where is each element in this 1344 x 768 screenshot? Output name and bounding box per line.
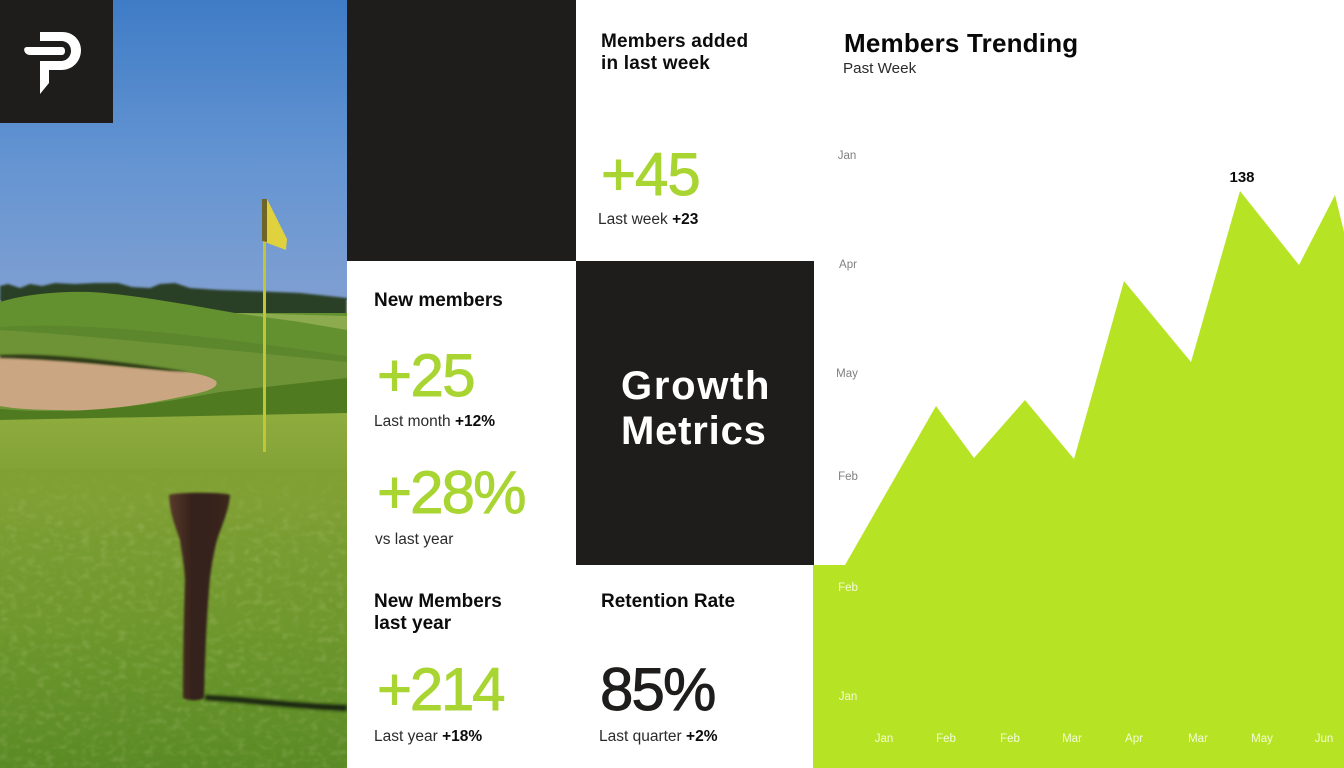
y axis labels: Jan	[839, 691, 857, 703]
y axis labels: Apr	[839, 259, 857, 271]
golf tee	[169, 493, 230, 700]
fringe	[0, 378, 347, 420]
subtitle: Past Week	[843, 60, 916, 77]
value: +214	[377, 656, 503, 723]
heading	[374, 591, 502, 634]
value: +25	[377, 342, 474, 409]
chart area	[813, 191, 1344, 768]
hills	[0, 292, 347, 420]
heading: last year	[374, 613, 451, 634]
panel: members trending heading	[843, 28, 1078, 77]
tee shadow	[205, 695, 347, 711]
panel: new members	[374, 290, 525, 548]
x axis labels: May	[1251, 733, 1273, 745]
title: Growth	[621, 364, 771, 408]
value: +45	[601, 141, 700, 208]
y axis labels	[836, 150, 858, 703]
flag	[262, 199, 287, 250]
y axis labels: Feb	[838, 582, 858, 594]
heading: New members	[374, 290, 503, 311]
comparison: Last quarter +2%	[599, 728, 718, 745]
sand bunker	[0, 356, 217, 410]
x axis labels: Feb	[936, 733, 956, 745]
heading: Retention Rate	[601, 591, 735, 612]
x axis labels: Mar	[1062, 733, 1082, 745]
x axis labels: Feb	[1000, 733, 1020, 745]
x axis labels: Apr	[1125, 733, 1143, 745]
panel: golf course photo	[0, 0, 347, 768]
panel: new members last year	[374, 591, 504, 745]
heading: Members added	[601, 31, 748, 52]
comparison: Last year +18%	[374, 728, 482, 745]
icon: P logo	[24, 32, 81, 94]
title: Members Trending	[844, 28, 1078, 58]
center panel: Growth Metrics	[576, 261, 814, 565]
heading	[601, 31, 748, 74]
x axis labels: Jan	[875, 733, 893, 745]
x axis labels: Jun	[1315, 733, 1333, 745]
sky	[0, 0, 347, 300]
title: Metrics	[621, 409, 767, 453]
y axis labels: Jan	[838, 150, 856, 162]
logo block	[0, 0, 113, 123]
fairway	[0, 413, 347, 768]
heading: New Members	[374, 591, 502, 612]
y axis labels: Feb	[838, 471, 858, 483]
area chart	[813, 150, 1344, 768]
flag pole	[263, 240, 266, 452]
comparison: Last week +23	[598, 211, 698, 228]
comparison: vs last year	[375, 531, 453, 548]
comparison: Last month +12%	[374, 413, 495, 430]
x axis labels	[875, 733, 1333, 745]
panel: members added in last week	[598, 31, 748, 228]
tree line	[0, 283, 347, 316]
decorative dark block	[347, 0, 576, 261]
value: +28%	[377, 459, 525, 526]
panel: retention rate	[599, 591, 735, 745]
y axis labels: May	[836, 368, 858, 380]
value: 85%	[600, 656, 714, 723]
title	[621, 364, 771, 453]
heading: in last week	[601, 53, 710, 74]
peak label: 138	[1229, 169, 1255, 186]
x axis labels: Mar	[1188, 733, 1208, 745]
